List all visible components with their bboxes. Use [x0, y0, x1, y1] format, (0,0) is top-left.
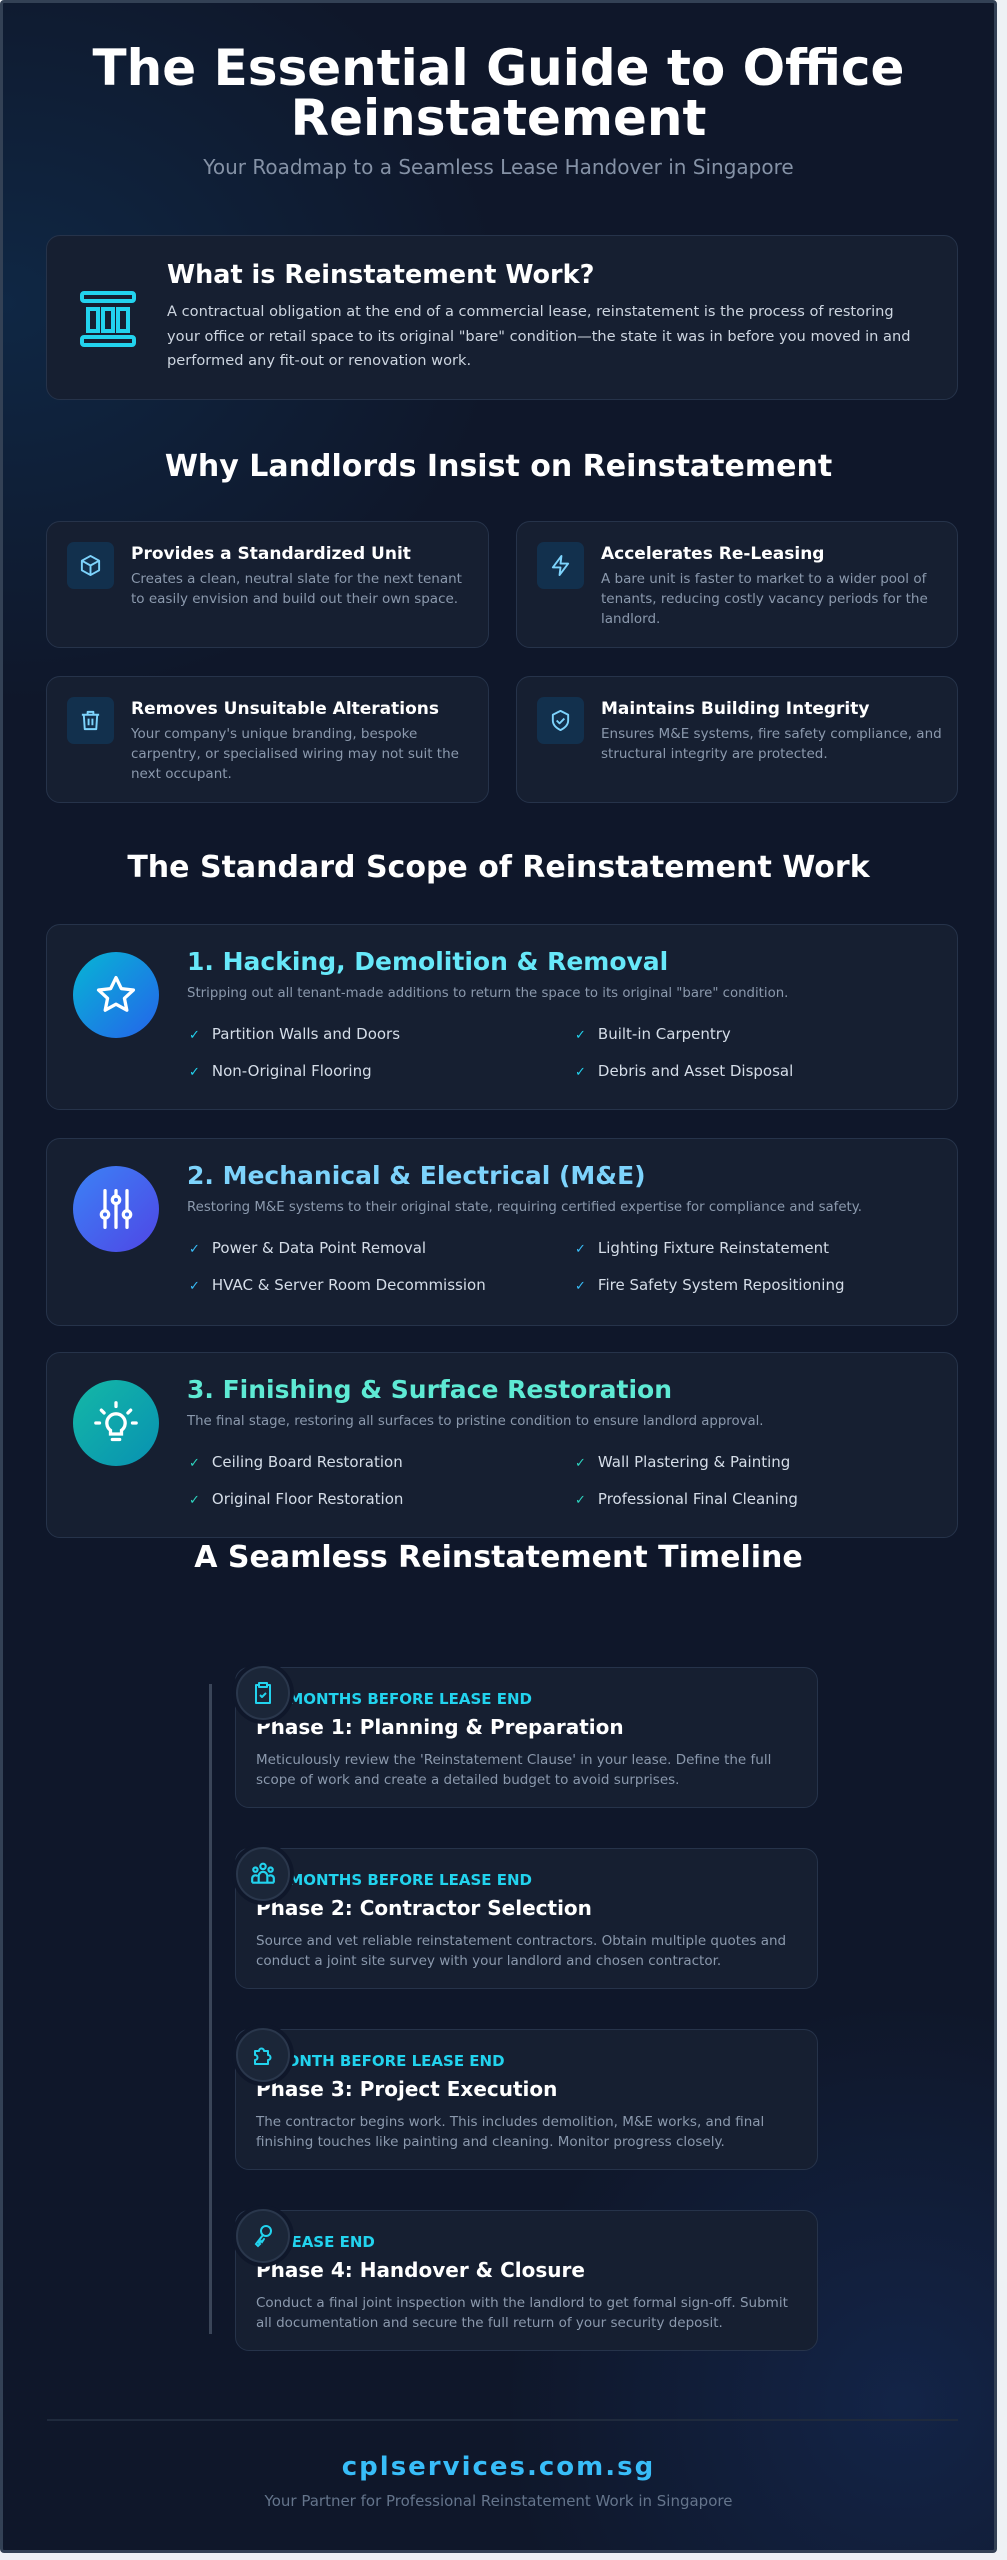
- panel: scope 3: ✓ Ceiling Board Restoration: [189, 1453, 403, 1471]
- panel: scope 2: Restoring M&E systems to their original state, requiring certified expertise for compliance and safety.: [187, 1200, 862, 1215]
- icon: sliders: [73, 1166, 159, 1252]
- icon: shield: [537, 697, 584, 744]
- timeline card: phase 3: Phase 3: Project Execution: [256, 2077, 557, 2101]
- panel: re-leasing: Accelerates Re-Leasing: [601, 544, 824, 564]
- title: The Essential Guide to Office: [93, 39, 904, 97]
- panel: scope 3: 3. Finishing & Surface Restoration: [187, 1375, 672, 1404]
- panel: integrity: [516, 676, 958, 803]
- icon: puzzle: [236, 2028, 290, 2082]
- panel: scope 2: [46, 1138, 958, 1326]
- panel: alterations: [46, 676, 489, 803]
- panel: re-leasing: [516, 521, 958, 648]
- heading: standard scope: The Standard Scope of Reinstatement Work: [127, 850, 870, 885]
- heading: why landlords: Why Landlords Insist on Reinstatement: [165, 449, 832, 484]
- subtitle: Your Roadmap to a Seamless Lease Handover in Singapore: [203, 155, 794, 179]
- footer tagline: Your Partner for Professional Reinstatement Work in Singapore: [265, 2492, 732, 2510]
- panel: scope 2: ✓ HVAC & Server Room Decommission: [189, 1276, 486, 1294]
- panel: scope 3: [46, 1352, 958, 1538]
- panel: standardized unit: [46, 521, 489, 648]
- footer url: cplservices.com.sg: [342, 2452, 655, 2482]
- panel: scope 1: ✓ Built-in Carpentry: [575, 1025, 731, 1043]
- panel: scope 3: ✓ Wall Plastering & Painting: [575, 1453, 790, 1471]
- panel: alterations: Your company's unique branding, bespoke carpentry, or specialised wiring may not suit the next occupant.: [131, 726, 459, 782]
- timeline card: phase 3: [235, 2029, 818, 2170]
- icon: team: [236, 1847, 290, 1901]
- panel: scope 1: Stripping out all tenant-made additions to return the space to its original "bare" condition.: [187, 986, 788, 1001]
- timeline line: [209, 1684, 212, 2334]
- icon: key: [236, 2209, 290, 2263]
- timeline card: phase 3: The contractor begins work. This includes demolition, M&E works, and final finishing touches like painting and cleaning. Monitor progress closely.: [256, 2114, 764, 2150]
- icon: bulb: [73, 1380, 159, 1466]
- text block: A contractual obligation at the end of a commercial lease, reinstatement is the process of restoring your office or retail space to its original "bare" condition—the state it was in before you moved in and performed any fit-out or renovation work.: [167, 303, 911, 369]
- timeline card: phase 1: Phase 1: Planning & Preparation: [256, 1715, 624, 1739]
- panel: integrity: Maintains Building Integrity: [601, 699, 869, 719]
- timeline card: phase 4: Phase 4: Handover & Closure: [256, 2258, 585, 2282]
- icon: clipboard: [236, 1666, 290, 1720]
- icon: trash: [67, 697, 114, 744]
- timeline card: phase 2: 2-3 MONTHS BEFORE LEASE END: [256, 1871, 532, 1889]
- timeline card: phase 2: Source and vet reliable reinstatement contractors. Obtain multiple quotes and conduct a joint site survey with your landlord and chosen contractor.: [256, 1933, 786, 1969]
- panel: scope 1: ✓ Non-Original Flooring: [189, 1062, 372, 1080]
- timeline card: phase 3: 1 MONTH BEFORE LEASE END: [256, 2052, 505, 2070]
- panel: scope 2: ✓ Power & Data Point Removal: [189, 1239, 426, 1257]
- timeline card: phase 4: [235, 2210, 818, 2351]
- panel: scope 3: ✓ Professional Final Cleaning: [575, 1490, 798, 1508]
- icon: building: [80, 291, 136, 347]
- panel: what is reinstatement: [46, 235, 958, 400]
- timeline card: phase 2: Phase 2: Contractor Selection: [256, 1896, 592, 1920]
- heading: What is Reinstatement Work?: [167, 260, 594, 290]
- panel: re-leasing: A bare unit is faster to market to a wider pool of tenants, reducing costly vacancy periods for the landlord.: [601, 571, 928, 627]
- heading: timeline: A Seamless Reinstatement Timeline: [194, 1540, 803, 1575]
- panel: alterations: Removes Unsuitable Alterations: [131, 699, 439, 719]
- icon: bolt: [537, 542, 584, 589]
- panel: integrity: Ensures M&E systems, fire safety compliance, and structural integrity are protected.: [601, 726, 942, 762]
- panel: scope 2: ✓ Lighting Fixture Reinstatement: [575, 1239, 829, 1257]
- icon: star: [73, 952, 159, 1038]
- timeline card: phase 1: 3-6 MONTHS BEFORE LEASE END: [256, 1690, 532, 1708]
- title: [92, 39, 904, 147]
- panel: scope 1: ✓ Debris and Asset Disposal: [575, 1062, 793, 1080]
- panel: scope 1: ✓ Partition Walls and Doors: [189, 1025, 400, 1043]
- panel: scope 3: The final stage, restoring all surfaces to pristine condition to ensure landlord approval.: [187, 1414, 764, 1429]
- panel: standardized unit: Creates a clean, neutral slate for the next tenant to easily envision and build out their own space.: [131, 571, 462, 607]
- timeline card: phase 1: [235, 1667, 818, 1808]
- title: Reinstatement: [291, 89, 706, 147]
- icon: cube: [67, 542, 114, 589]
- timeline card: phase 4: Conduct a final joint inspection with the landlord to get formal sign-off. Submit all documentation and secure the full return of your security deposit.: [256, 2295, 788, 2331]
- panel: scope 2: 2. Mechanical & Electrical (M&E): [187, 1161, 646, 1190]
- panel: standardized unit: Provides a Standardized Unit: [131, 544, 411, 564]
- timeline card: phase 4: AT LEASE END: [256, 2233, 375, 2251]
- panel: scope 3: ✓ Original Floor Restoration: [189, 1490, 403, 1508]
- panel: scope 1: 1. Hacking, Demolition & Removal: [187, 947, 668, 976]
- panel: scope 1: [46, 924, 958, 1110]
- divider: [47, 2419, 958, 2421]
- timeline card: phase 1: Meticulously review the 'Reinstatement Clause' in your lease. Define the full scope of work and create a detailed budget to avoid surprises.: [256, 1752, 771, 1788]
- panel: scope 2: ✓ Fire Safety System Repositioning: [575, 1276, 844, 1294]
- timeline card: phase 2: [235, 1848, 818, 1989]
